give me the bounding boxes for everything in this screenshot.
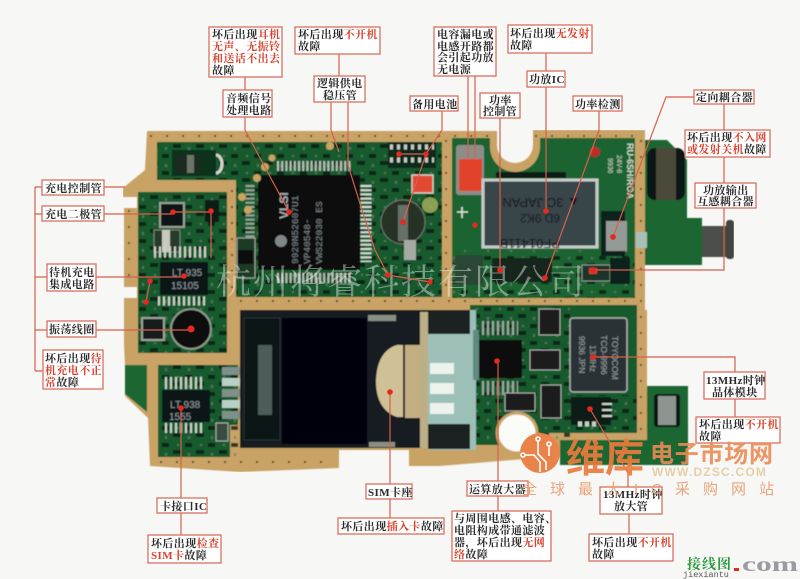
label: 13MHz clock amplifier: 13MHz时钟: [603, 487, 663, 501]
component: metal shield can: [654, 394, 680, 427]
label: audio signal processing circuit: 处理电路: [226, 103, 272, 117]
chip: standby charging IC: 15105: [171, 281, 199, 292]
callout: crystal fault: [696, 417, 780, 443]
callout: coupler fault: 或发射关机故障: [687, 142, 767, 156]
label: 13MHz crystal module: 13MHz时钟: [706, 373, 766, 387]
callout: charging fault: [43, 350, 103, 389]
label: 13MHz crystal module: [704, 372, 766, 399]
leader: SIM interface IC: [180, 408, 182, 535]
leader: power detection: [545, 111, 599, 278]
callout: crystal fault: 故障: [699, 429, 722, 443]
board: RF panel: [452, 138, 635, 298]
callout: clock amplifier fault: 故障: [592, 547, 615, 561]
component: 13MHz amplifier transistor: [571, 397, 612, 425]
callout: clock amplifier fault: [589, 534, 673, 561]
label: 13MHz crystal module: 晶体模块: [712, 385, 758, 399]
text: dzsc url: WWW.DZSC.COM: [652, 465, 767, 479]
label: 13MHz clock amplifier: [600, 487, 663, 514]
text: dzsc slogan: 全球最大IC采购网站: [522, 480, 774, 498]
callout: logic regulator fault: 故障: [298, 39, 321, 53]
text: board marking: [606, 143, 635, 200]
text: electronic market: 电子市场网: [650, 441, 773, 468]
label: SIM socket: SIM卡座: [368, 485, 413, 499]
label: PA output coupler: [695, 183, 756, 208]
board: main logic panel: [157, 142, 442, 297]
callout: SIM check fault: 坏后出现检查: [151, 536, 219, 550]
chip: power amplifier module: [483, 172, 597, 251]
leader: PA output coupler: [593, 104, 724, 270]
chip: main VLSI processor: VP40548-: [302, 218, 313, 264]
chip: SIM interface IC: 1555: [169, 412, 192, 423]
leader: power control transistor: [499, 118, 501, 270]
chip: operational amplifier: [473, 328, 522, 388]
chip: main VLSI processor: [250, 166, 366, 278]
label: PA output coupler: 功放输出: [703, 183, 749, 197]
leader: charge diode: [104, 212, 211, 214]
component: voltage regulator top left: [172, 150, 222, 176]
circuit board: [123, 130, 734, 472]
watermark: dzsc logo: [520, 433, 774, 498]
label: power detection: 功率检测: [575, 97, 621, 111]
board: antenna section: [645, 140, 702, 265]
callout: capacitor fault: [434, 27, 496, 76]
text: board marking: 24V-8: [615, 155, 622, 173]
callout: logic regulator fault: [295, 27, 380, 54]
callout: capacitor fault: 电容漏电或: [437, 27, 494, 41]
callout: charging fault: 机充电不正: [45, 363, 102, 377]
callout: capacitor fault: 无电源: [437, 62, 472, 76]
label: power control transistor: [480, 93, 520, 118]
label: oscillator coil: [47, 321, 96, 337]
label: PA output coupler: 互感耦合器: [697, 194, 754, 208]
component: yellow solder patch: [422, 197, 438, 213]
component: gold test pads: [238, 142, 334, 214]
leader: oscillator coil: [96, 329, 191, 331]
label: standby charging IC: [47, 264, 96, 291]
chip: main VLSI processor: 9929N52607U1: [290, 195, 301, 264]
board: SIM interface panel: [158, 365, 238, 457]
chip: power amplifier module: PF01411B: [500, 236, 560, 251]
leader: capacitor fault: [468, 76, 475, 160]
leader: left bus: [35, 187, 47, 371]
leader: 13MHz crystal: [593, 357, 735, 417]
icon: orange circuit circle: [520, 433, 560, 473]
leader: logic regulator: [331, 54, 430, 282]
label: logic supply regulator: 稳压管: [323, 88, 357, 102]
callout: SIM insert fault: 坏后出现插入卡故障: [341, 519, 444, 533]
label: operational amplifier: 运算放大器: [469, 482, 526, 496]
callout: audio circuit fault: 无声、无振铃: [212, 39, 280, 53]
chip: SIM interface IC: LT 938: [170, 400, 201, 411]
leader: SIM socket: [389, 392, 391, 518]
callout: charging fault: 坏后出现待: [45, 351, 102, 365]
callout: bandpass filter fault: 电阻构成带通滤波: [454, 523, 545, 537]
board: lower right green section: [560, 386, 688, 465]
component: white cross mark: [457, 207, 468, 218]
label: charge diode: 充电二极管: [45, 207, 102, 221]
leader: backup battery: [399, 111, 442, 222]
callout: coupler fault: [685, 130, 770, 157]
callout: coupler fault: 坏后出现不入网: [687, 130, 767, 144]
label: oscillator coil: 振荡线圈: [49, 322, 95, 336]
board: charging panel: [138, 192, 227, 353]
text: dot com: com: [742, 552, 799, 576]
board: clip hole: [497, 413, 537, 453]
label: standby charging IC: 集成电路: [49, 277, 95, 291]
leader lines and marker dots: [35, 53, 735, 535]
callout: capacitor fault: 会引起功放: [437, 50, 494, 64]
board: amplifier panel: [470, 305, 637, 445]
callout: power amplifier fault: [508, 25, 592, 53]
callout: logic regulator fault: 坏后出现不开机: [298, 27, 378, 41]
callout: audio circuit fault: [209, 27, 282, 77]
label: power amplifier IC: 功放IC: [529, 72, 565, 86]
label: backup battery: 备用电池: [412, 97, 458, 111]
label: charge control transistor: 充电控制管: [45, 181, 102, 195]
chip: main VLSI processor: VWS22030 ES: [314, 201, 325, 264]
component: ferrite cylinder: [647, 148, 685, 200]
component: orange capacitor: [412, 175, 433, 193]
callout: audio circuit fault: 坏后出现耳机: [212, 27, 280, 41]
chip: standby charging IC: [154, 252, 208, 301]
label: power control transistor: 功率: [489, 93, 512, 107]
component: charging diode: [154, 200, 219, 252]
component: oscillator coil: [142, 309, 211, 349]
component: SIM card holder: [240, 310, 476, 450]
chip: main VLSI processor: VLSI: [277, 192, 291, 219]
callout: bandpass filter fault: 络故障: [454, 547, 488, 561]
leader: charging IC: [96, 277, 184, 302]
callout: charging fault: 常故障: [45, 375, 79, 389]
callout: power amplifier fault: 故障: [510, 38, 533, 52]
leader: audio circuit: [245, 77, 289, 212]
callout: audio circuit fault: 故障: [212, 63, 235, 77]
leader: charge control transistor: [104, 187, 211, 258]
chip: 13MHz crystal module: 9936 JPN: [577, 336, 587, 373]
text: jiexiantu chinese: 接线图: [687, 556, 732, 573]
callout: SIM check fault: [148, 535, 221, 563]
component: backup battery pin row: [388, 142, 436, 168]
chip: power amplifier module: 6D 9K2: [520, 211, 560, 225]
callout: capacitor fault: 电感开路都: [437, 39, 494, 53]
board: lower left green tab: [125, 365, 147, 412]
label: audio signal processing circuit: 音频信号: [226, 91, 272, 105]
chip: 13MHz crystal module: 13MHz: [588, 345, 598, 372]
component: DIP regulator: [237, 238, 255, 278]
label: SIM interface IC: 卡接口IC: [160, 499, 207, 513]
label: 13MHz clock amplifier: 放大管: [614, 499, 648, 513]
icon: red dot: [734, 568, 739, 571]
component: amplifier inductors: [505, 309, 561, 418]
callout: bandpass filter fault: 器，坏后出现无网: [454, 535, 545, 549]
board: tan substrate: [123, 130, 647, 472]
component: power sense pad: [590, 147, 600, 157]
label: directional coupler: 定向耦合器: [696, 90, 753, 104]
marker dots: [143, 151, 616, 412]
leader: 13MHz amplifier: [590, 409, 629, 534]
component: antenna connector: [702, 220, 734, 259]
callout: crystal fault: 坏后出现不开机: [699, 417, 779, 431]
component: SIM side contacts: [222, 367, 242, 419]
chip: power amplifier module: ▲ 3C JAPAN: [502, 195, 580, 210]
callout: clock amplifier fault: 坏后出现不开机: [592, 535, 672, 549]
callout: bandpass filter fault: [452, 511, 557, 561]
callout: power amplifier fault: 坏后出现无发射: [510, 26, 590, 40]
chip: 13MHz crystal module: [570, 318, 627, 392]
text: board marking: RU-6SH/ROA: [625, 143, 635, 200]
component: directional coupler: [601, 211, 647, 256]
text: dzsc chinese brand: 维库: [566, 438, 644, 481]
chip: 13MHz crystal module: TCO-9996: [599, 335, 609, 375]
component: red electrolytic capacitor: [456, 145, 484, 195]
leader: directional coupler: [613, 97, 694, 237]
callout: audio circuit fault: 和送话不出去: [212, 51, 281, 65]
callout: bandpass filter fault: 与周围电感、电容、: [454, 511, 557, 525]
label: standby charging IC: 待机充电: [49, 265, 95, 279]
watermark: jiexiantu logo: [683, 552, 799, 579]
chip: 13MHz crystal module: TOYOCOM: [610, 336, 620, 380]
component: lower PA driver parts: [455, 255, 630, 285]
chip: SIM interface IC: [162, 383, 228, 441]
text: board marking: 9936: [606, 158, 613, 174]
chip: standby charging IC: LT 935: [172, 268, 203, 279]
leader: power amplifier IC: [545, 53, 547, 211]
board: small part texture: [138, 142, 637, 457]
watermark: company name: 杭州将睿科技有限公司: [216, 263, 586, 302]
component: backup coin battery: [381, 200, 425, 260]
callout: SIM check fault: SIM卡故障: [151, 548, 207, 562]
label: logic supply regulator: [314, 76, 365, 102]
label: logic supply regulator: 逻辑供电: [317, 76, 363, 90]
leader: operational amplifier: [497, 361, 499, 511]
board: edge vias: [129, 136, 642, 462]
label: power control transistor: 控制管: [483, 104, 517, 118]
label: audio signal processing circuit: [223, 90, 272, 117]
